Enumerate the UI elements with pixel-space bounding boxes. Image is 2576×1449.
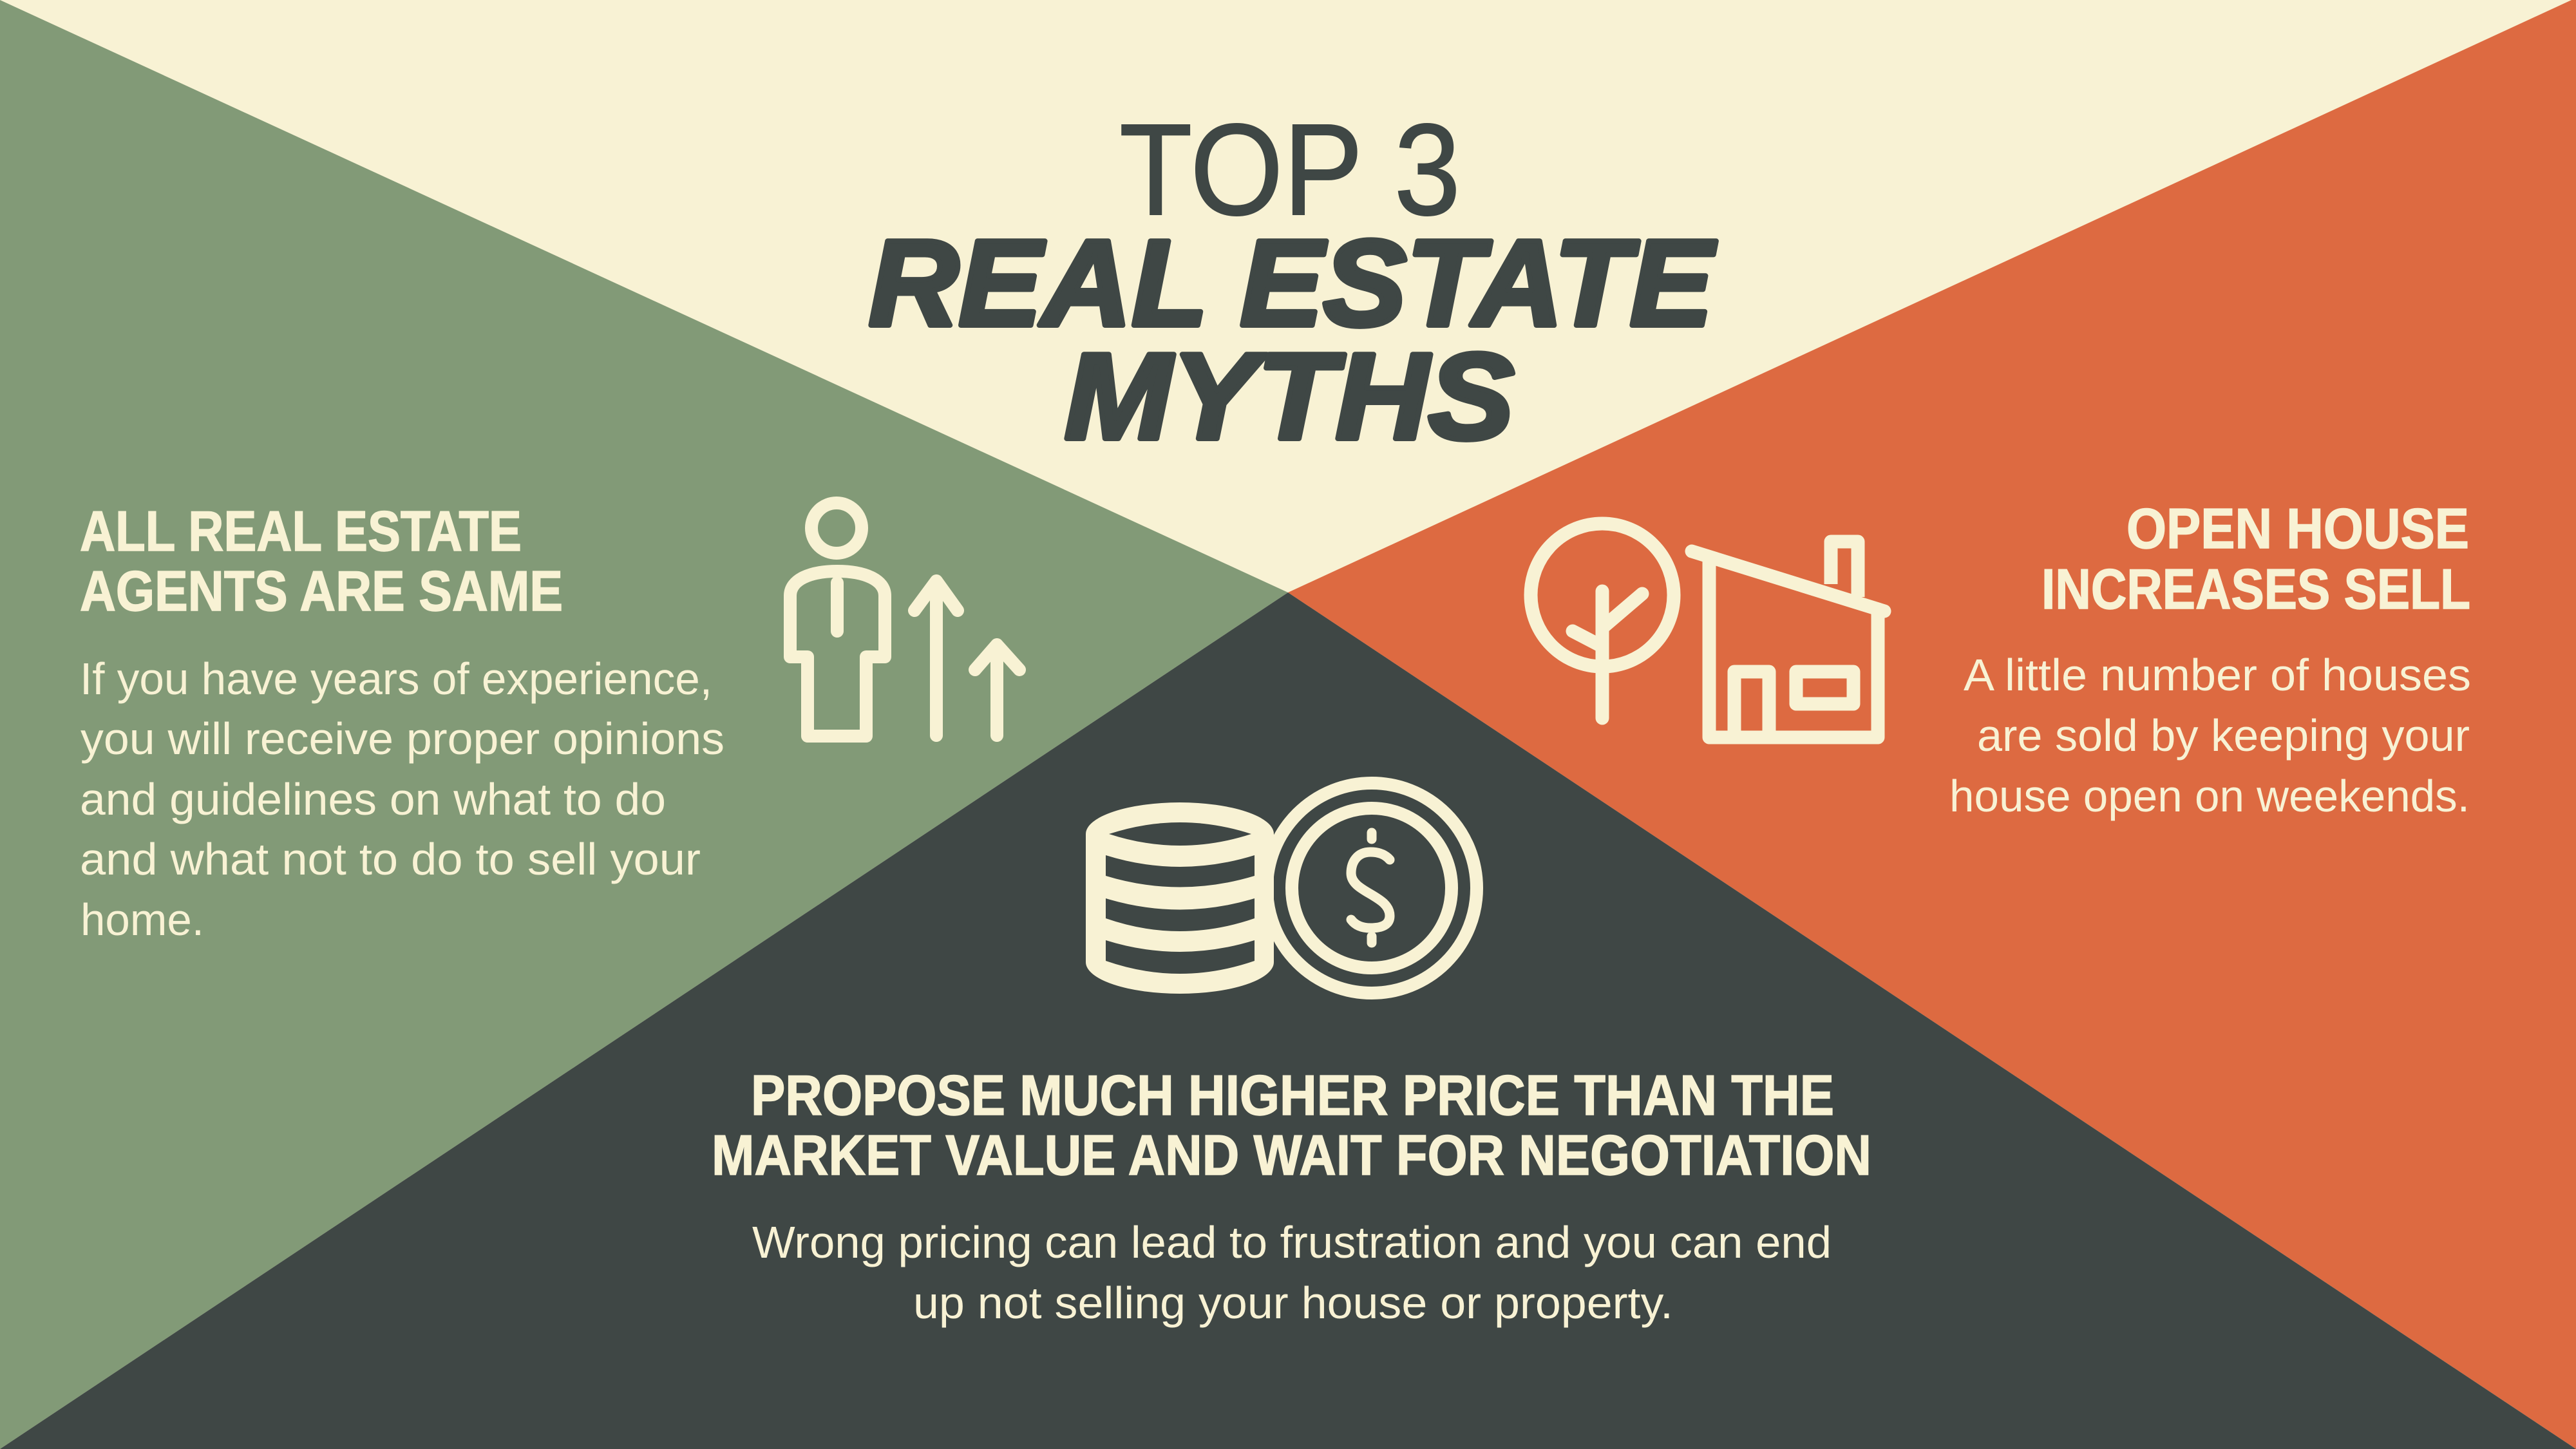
- body text: agents: If you have years of experience,: [80, 654, 712, 704]
- title line: myths: MYTHS: [1065, 328, 1514, 465]
- text block: pricing: [712, 1063, 1871, 1328]
- body text: open house: house open on weekends.: [1949, 771, 2470, 821]
- title line: top 3: TOP 3: [1119, 97, 1461, 242]
- person body: [790, 571, 885, 736]
- heading: open house: [2041, 497, 2470, 621]
- panel: bottom dark triangle: [0, 592, 2576, 1449]
- tree: [1531, 524, 1674, 718]
- panel: left green triangle: [0, 0, 1288, 1449]
- person tie: [831, 583, 844, 631]
- dollar coin: [1267, 783, 1477, 993]
- house: [1692, 542, 1884, 737]
- short arrow: [975, 645, 1019, 735]
- title line: real estate: REAL ESTATE: [869, 215, 1716, 352]
- body text: agents: you will receive proper opinions: [80, 714, 724, 764]
- heading: pricing: MARKET VALUE AND WAIT FOR NEGOTIATION: [712, 1123, 1871, 1187]
- heading: open house: OPEN HOUSE: [2126, 497, 2469, 560]
- tall arrow: [914, 581, 958, 735]
- body text: open house: [1949, 650, 2471, 821]
- heading: agents: ALL REAL ESTATE: [80, 499, 522, 563]
- heading: agents: [80, 499, 563, 623]
- heading: pricing: PROPOSE MUCH HIGHER PRICE THAN THE: [751, 1063, 1834, 1127]
- person head: [811, 503, 862, 553]
- body text: open house: A little number of houses: [1964, 650, 2471, 700]
- body text: open house: are sold by keeping your: [1977, 710, 2470, 761]
- body text: agents: and guidelines on what to do: [80, 774, 666, 824]
- body text: agents: home.: [80, 895, 204, 945]
- body text: agents: and what not to do to sell your: [80, 834, 701, 884]
- body text: pricing: up not selling your house or property.: [913, 1278, 1673, 1328]
- heading: pricing: [712, 1063, 1871, 1187]
- icon: coins and dollar: [1086, 783, 1477, 994]
- panel: right orange triangle: [1288, 0, 2576, 1449]
- text block: all real estate agents: [80, 499, 724, 945]
- body text: pricing: Wrong pricing can lead to frustration and you can end: [752, 1217, 1832, 1267]
- panel: top title background: [0, 0, 2571, 592]
- body text: agents: [80, 654, 724, 945]
- body text: pricing: [752, 1217, 1832, 1328]
- heading: agents: AGENTS ARE SAME: [80, 559, 563, 623]
- text block: open house: [1949, 497, 2471, 821]
- icon: person with up arrows: [790, 503, 1019, 736]
- coin stack: [1086, 802, 1274, 994]
- heading: open house: INCREASES SELL: [2041, 557, 2470, 621]
- icon: tree and house: [1531, 524, 1884, 737]
- title: [869, 97, 1716, 465]
